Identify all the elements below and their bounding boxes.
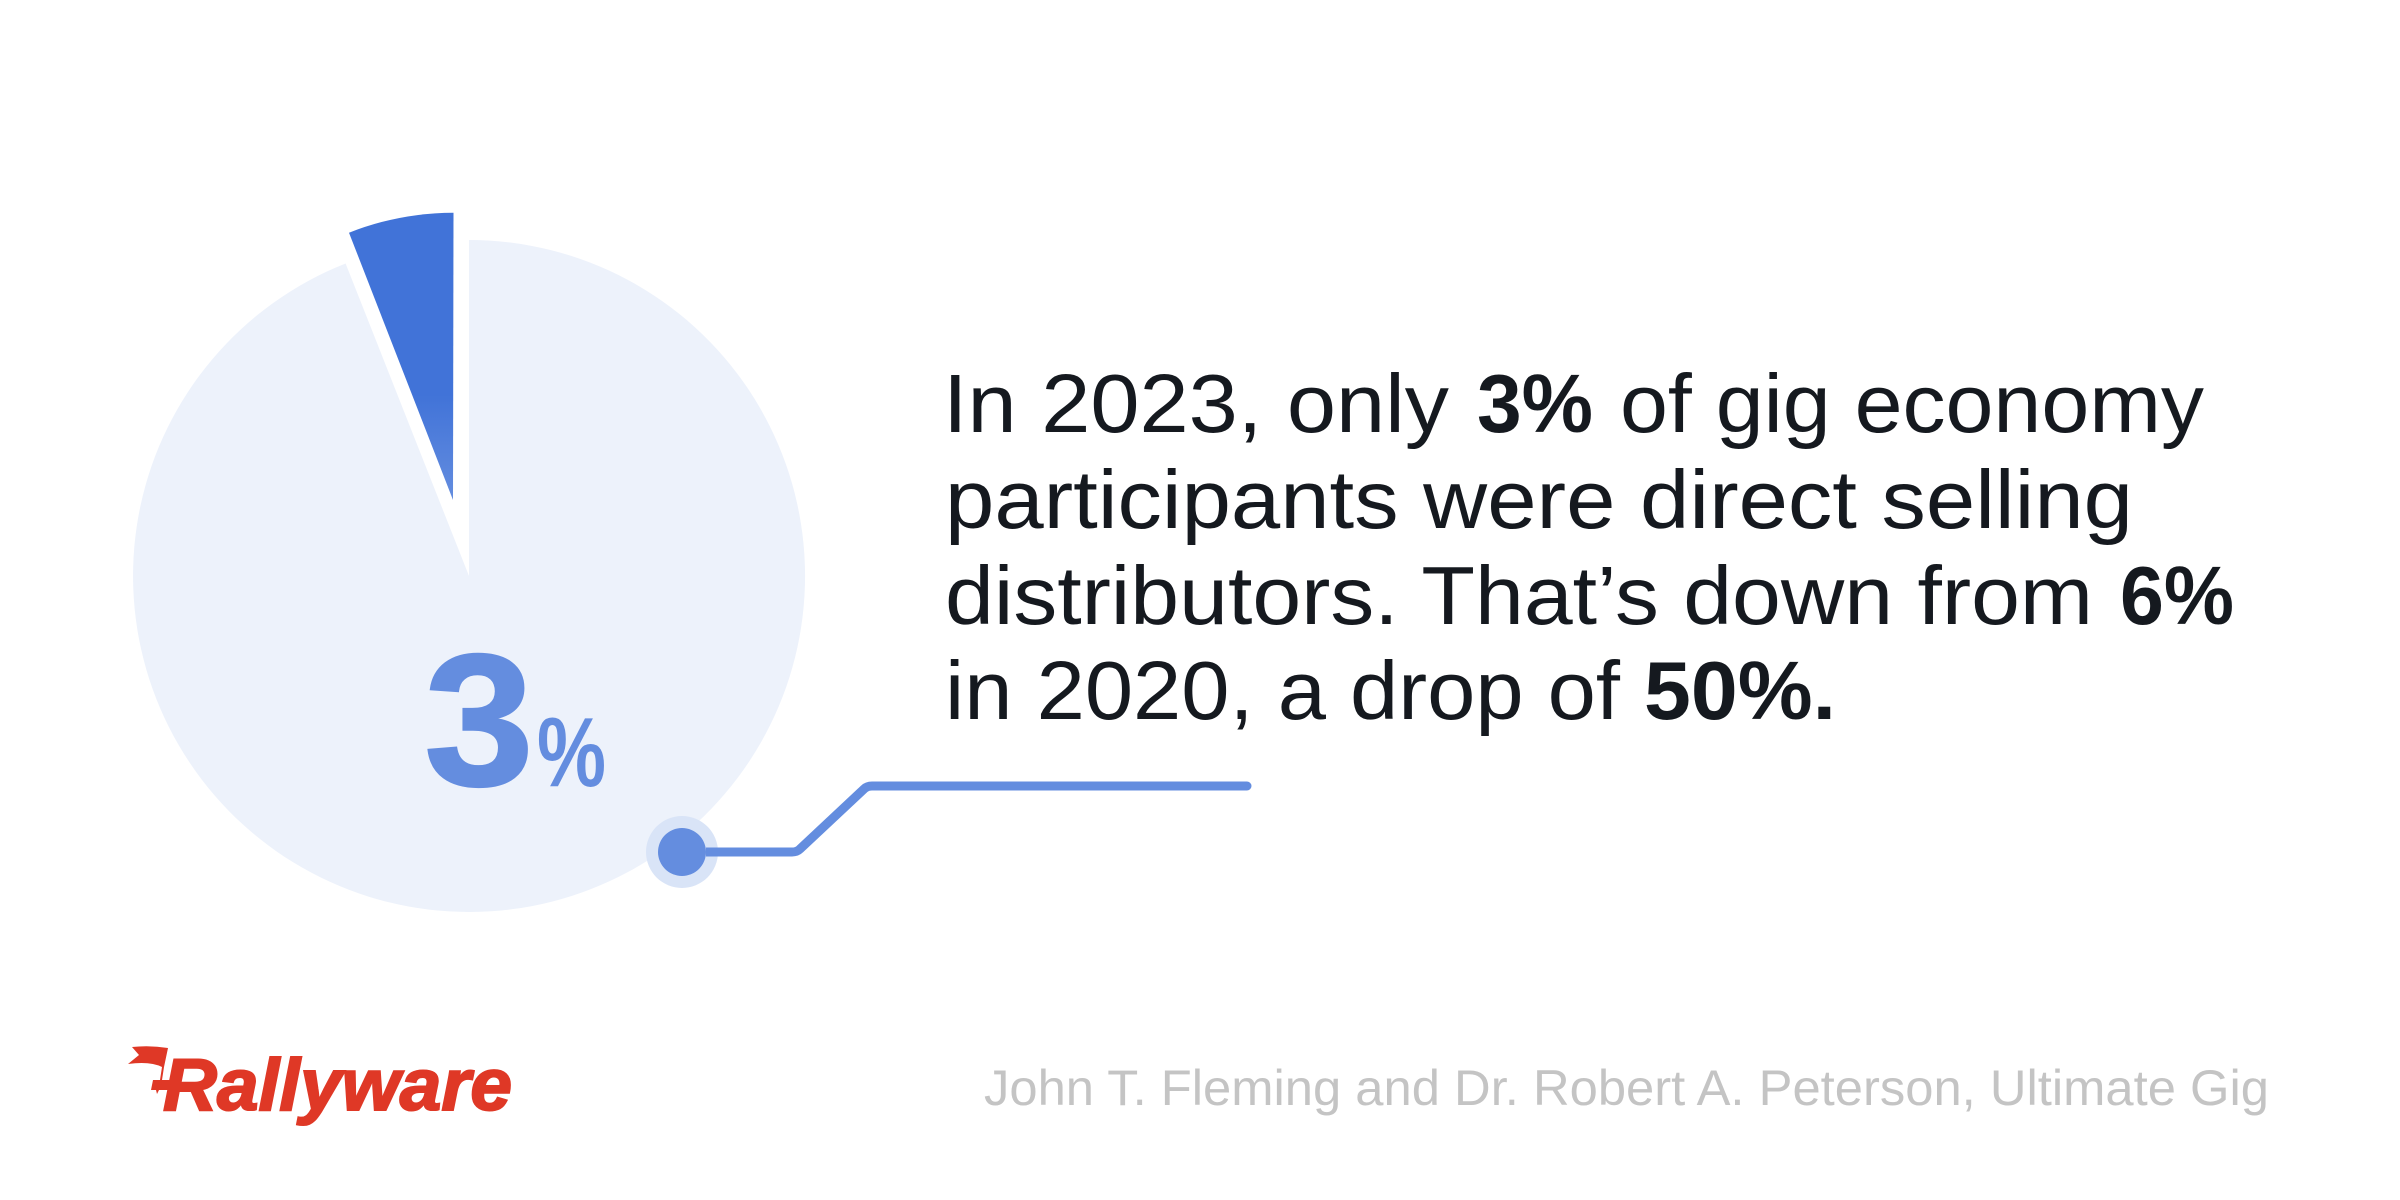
logo wordmark: Rallyware	[163, 1045, 512, 1126]
line 1	[943, 357, 2205, 450]
line 2: participants were direct selling	[945, 453, 2133, 546]
line 3: distributors. That’s down from	[945, 549, 2093, 642]
connector dot	[658, 828, 706, 876]
line 3: 6%	[2120, 549, 2234, 642]
pie highlighted 3% slice	[349, 213, 454, 500]
pie remainder slice	[133, 240, 805, 912]
line 4: 50%.	[1644, 644, 1836, 737]
line 1: In 2023, only	[943, 357, 1450, 450]
callout connector line	[646, 786, 1247, 888]
line 4: in 2020, a drop of	[945, 644, 1621, 737]
line 1: of gig economy	[1620, 357, 2205, 450]
pie value label: %	[537, 697, 606, 807]
main statement text	[943, 357, 2234, 737]
logo: Rallyware	[128, 1045, 512, 1126]
connector stroke over halo	[706, 848, 718, 856]
pie value label	[424, 615, 606, 825]
connector dot halo	[646, 816, 718, 888]
source credit: John T. Fleming and Dr. Robert A. Peterson, Ultimate Gig	[984, 1060, 2269, 1116]
pie chart	[133, 213, 805, 912]
line 1: 3%	[1477, 357, 1593, 450]
icon: flag	[128, 1046, 180, 1094]
connector stroke	[682, 786, 1247, 852]
pie value label: 3	[424, 615, 534, 825]
